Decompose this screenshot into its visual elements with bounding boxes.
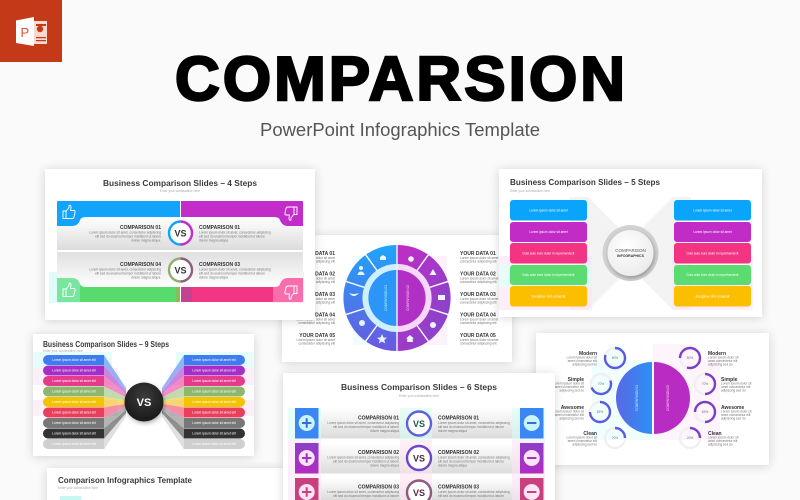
panel: comparison circle right	[536, 333, 769, 465]
central split circle chart: COMPARISON 02	[666, 385, 670, 411]
data labels left: consectetur adipiscing elit	[298, 300, 335, 304]
heading: Business Comparison Slides – 6 Steps	[341, 382, 497, 392]
VS badge	[124, 382, 164, 422]
VS badges	[169, 222, 192, 282]
texts right: Lorem ipsum dolor sit amet, consectetur adipiscing	[438, 456, 510, 460]
labels right: Lorem ipsum dolor sit	[721, 382, 752, 386]
data labels left: consectetur adipiscing elit	[298, 280, 335, 284]
labels left: adipiscing sed do	[572, 442, 597, 446]
pale tint blocks	[49, 272, 304, 303]
texts right: elit sed do eiusmod tempor incididunt ut labore	[438, 460, 504, 464]
data labels left: Lorem ipsum dolor sit amet	[297, 256, 335, 260]
bar captions: Lorem ipsum dolor sit amet elit	[52, 400, 96, 404]
data labels right: Lorem ipsum dolor sit amet	[460, 297, 499, 301]
labels left: Lorem ipsum dolor sit	[554, 410, 584, 414]
bar captions: Lorem ipsum dolor sit amet elit	[52, 442, 96, 446]
data labels left: Lorem ipsum dolor sit amet	[297, 276, 335, 280]
data labels left: consectetur adipiscing elit	[298, 260, 335, 264]
subheading: Enter your subheadline here	[399, 394, 439, 398]
VS badges: VS	[413, 488, 425, 498]
comparison texts: dolore magna aliqua.	[131, 238, 161, 242]
bar captions	[52, 358, 236, 446]
step boxes right: Excepteur sint occaecat	[696, 294, 730, 298]
texts left: Lorem ipsum dolor sit amet, consectetur adipiscing	[327, 490, 399, 494]
comparison bands	[57, 217, 303, 287]
texts right: Lorem ipsum dolor sit amet, consectetur adipiscing	[438, 421, 510, 425]
data labels left: YOUR DATA 05	[299, 333, 335, 339]
pale tint blocks	[592, 344, 720, 440]
step boxes left	[510, 200, 587, 306]
subtitle: PowerPoint Infographics Template	[260, 120, 540, 140]
labels left	[554, 351, 597, 446]
data labels left: YOUR DATA 04	[299, 312, 335, 318]
data labels right: Lorem ipsum dolor sit amet	[460, 338, 499, 342]
comparison texts right: elit sed do eiusmod tempor incididunt ut labore	[199, 272, 265, 276]
comparison texts: elit sed do eiusmod tempor incididunt ut labore	[95, 234, 161, 238]
labels left: amet consectetur elit	[568, 439, 597, 443]
labels right: adipiscing sed do	[721, 416, 746, 420]
VS badges: VS	[174, 228, 187, 238]
data labels right: consectetur adipiscing elit	[460, 300, 497, 304]
data labels left	[297, 251, 335, 346]
labels left: Clean	[583, 431, 597, 437]
texts left: Lorem ipsum dolor sit amet, consectetur adipiscing	[327, 456, 399, 460]
labels left: Simple	[568, 377, 584, 383]
ring percentages	[597, 356, 708, 440]
labels right: amet consectetur elit	[721, 385, 751, 389]
comparison texts	[89, 225, 161, 280]
panel: 4 steps	[45, 169, 315, 320]
ring percentages: 80%	[612, 356, 618, 360]
data labels left: Lorem ipsum dolor sit amet	[297, 297, 335, 301]
labels right: Awesome	[721, 405, 744, 411]
bar captions: Lorem ipsum dolor sit amet elit	[192, 442, 236, 446]
data labels right: consectetur adipiscing elit	[460, 321, 497, 325]
VS badges	[407, 412, 431, 500]
bar captions: Lorem ipsum dolor sit amet elit	[52, 421, 96, 425]
texts right: dolore magna aliqua	[438, 464, 467, 468]
comparison texts: COMPARISON 04	[120, 262, 161, 268]
ring percentages: 65%	[597, 410, 603, 414]
funnel connectors	[104, 355, 184, 450]
heading: Business Comparison Slides – 4 Steps	[103, 178, 257, 188]
pale tint blocks	[33, 352, 254, 416]
panel: 6 steps	[283, 373, 555, 500]
wheel chart	[343, 245, 451, 351]
bars left	[43, 355, 104, 449]
step boxes right: Duis aute irure dolor in reprehenderit	[687, 273, 739, 277]
labels right: Simple	[721, 377, 738, 383]
step boxes right	[674, 200, 751, 306]
central split circle chart: COMPARISON 01	[635, 385, 639, 411]
comparison texts right: COMPARISON 03	[199, 262, 240, 268]
texts right: COMPARISON 03	[438, 484, 479, 490]
texts left	[327, 416, 399, 498]
texts right: elit sed do eiusmod tempor incididunt ut labore	[438, 425, 504, 429]
panel: infographics template bottom	[47, 468, 285, 500]
step boxes left: Excepteur sint occaecat	[532, 294, 566, 298]
panel: 9 steps	[33, 334, 254, 456]
labels left: adipiscing sed do	[572, 362, 597, 366]
comparison texts: dolore magna aliqua.	[131, 276, 161, 280]
labels right	[708, 351, 752, 446]
comparison texts right: dolore magna aliqua.	[199, 238, 229, 242]
bar captions: Lorem ipsum dolor sit amet elit	[192, 379, 236, 383]
data labels right: Lorem ipsum dolor sit amet	[460, 276, 499, 280]
VS badges: VS	[174, 266, 187, 276]
data labels right: YOUR DATA 02	[460, 272, 496, 278]
labels left: Lorem ipsum dolor sit	[554, 382, 584, 386]
labels right: Lorem ipsum dolor sit	[708, 436, 739, 440]
labels right: Clean	[708, 431, 722, 437]
bar captions: Lorem ipsum dolor sit amet elit	[52, 390, 96, 394]
data labels left: consectetur adipiscing elit	[298, 321, 335, 325]
texts left: COMPARISON 02	[358, 450, 399, 456]
texts left: elit sed do eiusmod tempor incididunt ut labore	[333, 425, 399, 429]
step boxes right: Lorem ipsum dolor sit amet	[693, 230, 732, 234]
data labels right: consectetur adipiscing elit	[460, 280, 497, 284]
ring percentages: 70%	[702, 382, 708, 386]
bar captions: Lorem ipsum dolor sit amet elit	[192, 421, 236, 425]
central circle	[602, 225, 658, 281]
texts right: Lorem ipsum dolor sit amet, consectetur adipiscing	[438, 490, 510, 494]
bar captions: Lorem ipsum dolor sit amet elit	[192, 390, 236, 394]
labels right: adipiscing sed do	[721, 388, 746, 392]
VS badges: VS	[413, 419, 425, 429]
texts right: elit sed do eiusmod tempor incididunt ut labore	[438, 494, 504, 498]
texts right: dolore magna aliqua	[438, 429, 467, 433]
comparison texts right: Lorem ipsum dolor sit amet, consectetur adipiscing	[199, 230, 271, 234]
bar captions: Lorem ipsum dolor sit amet elit	[192, 358, 236, 362]
texts left: dolore magna aliqua	[370, 464, 399, 468]
minus tiles	[520, 408, 544, 500]
data labels right: Lorem ipsum dolor sit amet	[460, 256, 499, 260]
step boxes right: Duis aute irure dolor in reprehenderit	[687, 252, 739, 256]
bar captions: Lorem ipsum dolor sit amet elit	[192, 410, 236, 414]
progress rings right	[680, 348, 715, 448]
bar captions: Lorem ipsum dolor sit amet elit	[192, 432, 236, 436]
labels right: amet consectetur elit	[708, 439, 738, 443]
pale tint blocks	[353, 256, 447, 345]
grey bands	[318, 408, 520, 500]
step boxes left: Duis aute irure dolor in reprehenderit	[523, 273, 575, 277]
central circle: COMPARISON	[615, 248, 646, 253]
data labels right: consectetur adipiscing elit	[460, 342, 497, 346]
plus tiles	[295, 408, 318, 500]
comparison texts right: COMPARISON 01	[199, 225, 240, 231]
data labels right	[460, 251, 499, 346]
data labels left: consectetur adipiscing elit	[298, 342, 335, 346]
bar captions: Lorem ipsum dolor sit amet elit	[52, 358, 96, 362]
PowerPoint badge	[0, 0, 62, 62]
data labels right: YOUR DATA 04	[460, 312, 496, 318]
comparison texts: Lorem ipsum dolor sit amet, consectetur adipiscing	[89, 230, 161, 234]
labels left: amet consectetur elit	[568, 359, 597, 363]
data labels right: YOUR DATA 05	[460, 333, 496, 339]
bar captions: Lorem ipsum dolor sit amet elit	[192, 400, 236, 404]
data labels left: YOUR DATA 03	[299, 292, 335, 298]
data labels left: Lorem ipsum dolor sit amet	[297, 318, 335, 322]
labels right: adipiscing sed do	[708, 442, 733, 446]
labels right: Lorem ipsum dolor sit	[708, 356, 739, 360]
data labels right: consectetur adipiscing elit	[460, 260, 497, 264]
labels left: adipiscing sed do	[559, 388, 584, 392]
labels left: amet consectetur elit	[555, 413, 584, 417]
labels right: amet consectetur elit	[721, 413, 751, 417]
data labels right: YOUR DATA 03	[460, 292, 496, 298]
bar captions: Lorem ipsum dolor sit amet elit	[52, 368, 96, 372]
ring percentages: 65%	[702, 410, 708, 414]
header blocks	[57, 201, 303, 302]
title: COMPARSION	[175, 45, 625, 114]
data labels left: YOUR DATA 02	[299, 272, 335, 278]
labels left: adipiscing sed do	[559, 416, 584, 420]
central split circle chart	[616, 362, 690, 434]
data labels left: Lorem ipsum dolor sit amet	[297, 338, 335, 342]
panel: data wheel centre	[282, 235, 512, 362]
data labels right: YOUR DATA 01	[460, 251, 496, 257]
labels left: Modern	[579, 351, 597, 357]
texts left: COMPARISON 01	[358, 416, 399, 422]
heading: Business Comparison Slides – 9 Steps	[43, 339, 169, 349]
step boxes left: Lorem ipsum dolor sit amet	[529, 208, 568, 212]
texts left: Lorem ipsum dolor sit amet, consectetur adipiscing	[327, 421, 399, 425]
ring percentages: 80%	[687, 356, 693, 360]
texts right: COMPARISON 01	[438, 416, 479, 422]
icons: thumbs	[63, 205, 297, 299]
labels right: Lorem ipsum dolor sit	[721, 410, 752, 414]
bar captions: Lorem ipsum dolor sit amet elit	[52, 379, 96, 383]
labels left: Awesome	[561, 405, 584, 411]
labels left: Lorem ipsum dolor sit	[567, 436, 597, 440]
data labels right: Lorem ipsum dolor sit amet	[460, 318, 499, 322]
texts left: elit sed do eiusmod tempor incididunt ut labore	[333, 494, 399, 498]
data labels left: YOUR DATA 01	[299, 251, 335, 257]
icon: PowerPoint logo: P	[20, 25, 29, 40]
texts left: COMPARISON 03	[358, 484, 399, 490]
step boxes left: Duis aute irure dolor in reprehenderit	[523, 252, 575, 256]
bars right	[184, 355, 245, 449]
step boxes right: Lorem ipsum dolor sit amet	[693, 208, 732, 212]
bar captions: Lorem ipsum dolor sit amet elit	[192, 368, 236, 372]
pale tint blocks	[288, 408, 545, 500]
pale tint blocks	[499, 256, 753, 310]
progress rings left	[588, 348, 625, 448]
comparison texts right: elit sed do eiusmod tempor incididunt ut labore	[199, 234, 265, 238]
bar captions: Lorem ipsum dolor sit amet elit	[52, 432, 96, 436]
texts left: dolore magna aliqua	[370, 429, 399, 433]
comparison texts right	[199, 225, 271, 280]
wheel chart: COMPARISON 01	[384, 285, 388, 311]
comparison texts: COMPARISON 01	[120, 225, 161, 231]
step boxes left: Lorem ipsum dolor sit amet	[529, 230, 568, 234]
labels right: Modern	[708, 351, 726, 357]
grey connectors	[570, 197, 691, 310]
heading: Business Comparison Slides – 5 Steps	[510, 177, 660, 187]
texts right	[438, 416, 510, 498]
comparison texts right: dolore magna aliqua.	[199, 276, 229, 280]
central circle: INFOGRAPHICS	[617, 254, 645, 258]
panel: 5 steps	[499, 169, 762, 317]
VS badge: VS	[137, 397, 151, 409]
comparison texts right: Lorem ipsum dolor sit amet, consectetur adipiscing	[199, 268, 271, 272]
ring percentages: 20%	[687, 436, 693, 440]
subheading: Enter your subheadline here	[510, 189, 550, 193]
heading: Comparison Infographics Template	[58, 475, 192, 485]
subheading: Enter your subheadline here	[43, 349, 83, 353]
VS badges: VS	[413, 454, 425, 464]
labels right: amet consectetur elit	[708, 359, 738, 363]
wheel icons	[349, 255, 445, 344]
labels left: amet consectetur elit	[555, 385, 584, 389]
ring percentages: 20%	[612, 436, 618, 440]
subheading: Enter your subheadline here	[58, 486, 98, 490]
comparison texts: elit sed do eiusmod tempor incididunt ut labore	[95, 272, 161, 276]
tint blocks	[60, 496, 81, 500]
texts right: COMPARISON 02	[438, 450, 479, 456]
wheel chart: COMPARISON 02	[406, 285, 410, 311]
subheading: Enter your subheadline here	[160, 189, 200, 193]
comparison texts: Lorem ipsum dolor sit amet, consectetur adipiscing	[89, 268, 161, 272]
labels left: Lorem ipsum dolor sit	[567, 356, 597, 360]
labels right: adipiscing sed do	[708, 362, 733, 366]
ring percentages: 70%	[598, 382, 604, 386]
texts left: elit sed do eiusmod tempor incididunt ut labore	[333, 460, 399, 464]
bar captions: Lorem ipsum dolor sit amet elit	[52, 410, 96, 414]
